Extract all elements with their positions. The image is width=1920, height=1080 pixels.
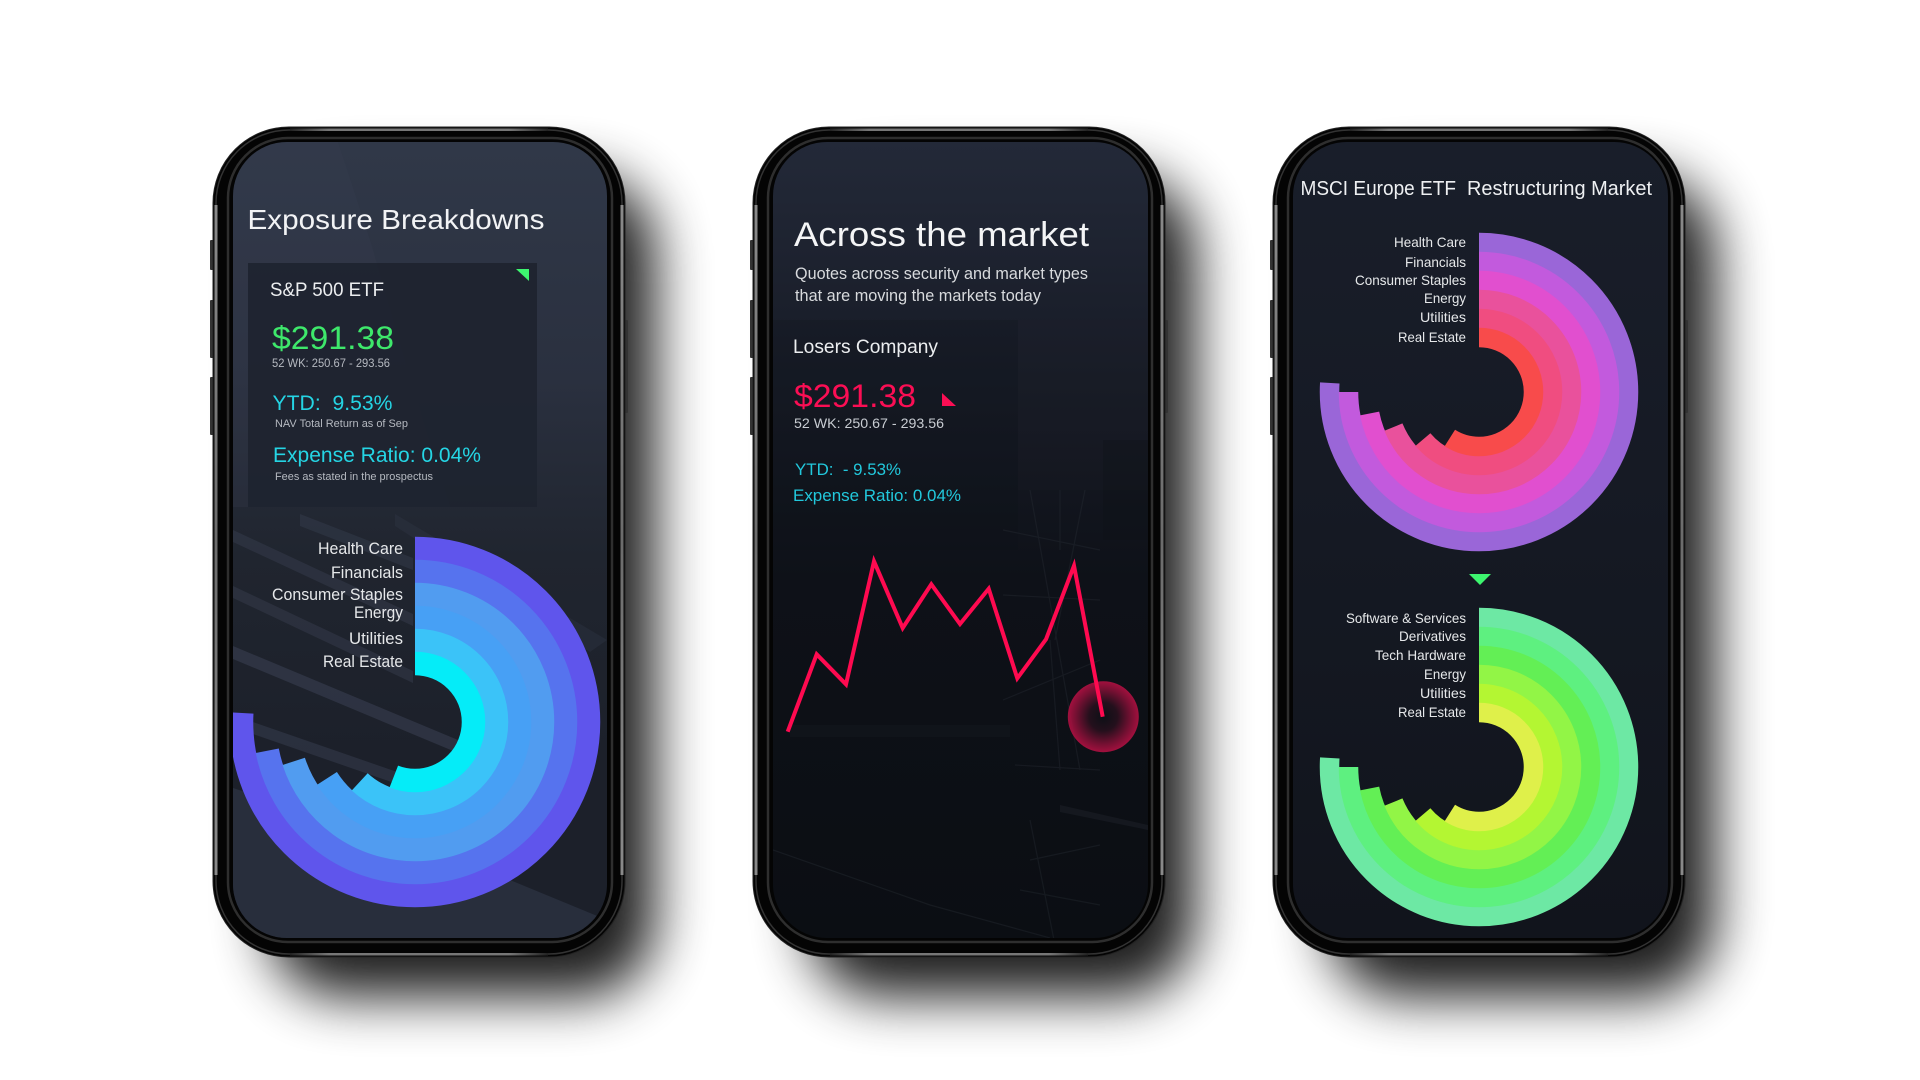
radial bar chart: blue <box>242 548 588 896</box>
title: Exposure Breakdowns <box>248 204 544 235</box>
price: $291.38 <box>272 320 394 356</box>
phone body <box>1273 127 1685 957</box>
phone: MSCI Europe ETF <box>1270 127 1715 997</box>
panel: S&P 500 ETF <box>248 263 537 507</box>
chart legend: Financials <box>331 564 403 582</box>
phone side buttons <box>750 240 1168 435</box>
purple chart legend: Real Estate <box>1398 329 1466 345</box>
purple chart legend: Health Care <box>1394 234 1466 250</box>
phone shadow <box>808 175 1195 997</box>
chart legend: Health Care <box>318 540 403 558</box>
line chart <box>788 561 1103 732</box>
subtitle <box>795 264 1088 305</box>
company name: Losers Company <box>793 336 938 358</box>
phone side buttons <box>1270 240 1688 435</box>
price: $291.38 <box>794 378 916 414</box>
down triangle <box>942 393 956 406</box>
screen background <box>233 142 607 938</box>
green chart legend: Software & Services <box>1346 610 1466 626</box>
fees note: Fees as stated in the prospectus <box>275 471 433 483</box>
title: Restructuring Market <box>1467 178 1652 200</box>
title: MSCI Europe ETF <box>1300 178 1456 200</box>
phone shadow <box>268 175 655 997</box>
purple chart legend: Financials <box>1405 254 1466 270</box>
radial bar chart: purple <box>1330 242 1628 542</box>
phone side buttons <box>210 240 628 435</box>
title <box>1300 178 1652 200</box>
green chart legend: Energy <box>1424 666 1466 682</box>
green chart legend: Tech Hardware <box>1375 647 1466 663</box>
chart legend: Utilities <box>349 630 403 648</box>
purple chart legend: Consumer Staples <box>1355 272 1466 288</box>
phone body <box>753 127 1165 957</box>
subtitle: Quotes across security and market types <box>795 264 1088 283</box>
52 week range: 52 WK: 250.67 - 293.56 <box>794 415 944 431</box>
green chart legend: Utilities <box>1420 685 1466 701</box>
expense ratio: Expense Ratio: 0.04% <box>273 444 481 467</box>
end point glow <box>1068 681 1139 752</box>
phone: across the market <box>750 127 1195 997</box>
purple chart legend <box>1355 234 1466 345</box>
green chart legend: Derivatives <box>1399 628 1466 644</box>
YTD: YTD: - 9.53% <box>795 461 901 479</box>
chart legend: Real Estate <box>323 653 403 671</box>
radial bar chart: green <box>1330 618 1628 916</box>
purple chart legend: Energy <box>1424 290 1466 306</box>
phone shadow <box>1328 175 1715 997</box>
expense ratio: Expense Ratio: 0.04% <box>793 487 961 505</box>
subtitle: that are moving the markets today <box>795 286 1041 305</box>
green down triangle <box>1469 574 1491 585</box>
fund name: S&P 500 ETF <box>270 279 384 301</box>
chart legend <box>272 540 404 671</box>
green chart legend: Real Estate <box>1398 704 1466 720</box>
52 week range: 52 WK: 250.67 - 293.56 <box>272 358 390 370</box>
screen background with city <box>773 142 1148 960</box>
NAV note: NAV Total Return as of Sep <box>275 418 408 430</box>
up triangle <box>516 269 529 281</box>
screen background <box>1293 142 1668 938</box>
phone: exposure breakdowns <box>210 127 655 997</box>
green chart legend <box>1346 610 1466 720</box>
chart legend: Energy <box>354 604 404 622</box>
purple chart legend: Utilities <box>1420 309 1466 325</box>
chart legend: Consumer Staples <box>272 586 403 604</box>
title: Across the market <box>794 216 1090 254</box>
YTD: YTD: 9.53% <box>272 391 392 415</box>
phone body <box>213 127 625 957</box>
